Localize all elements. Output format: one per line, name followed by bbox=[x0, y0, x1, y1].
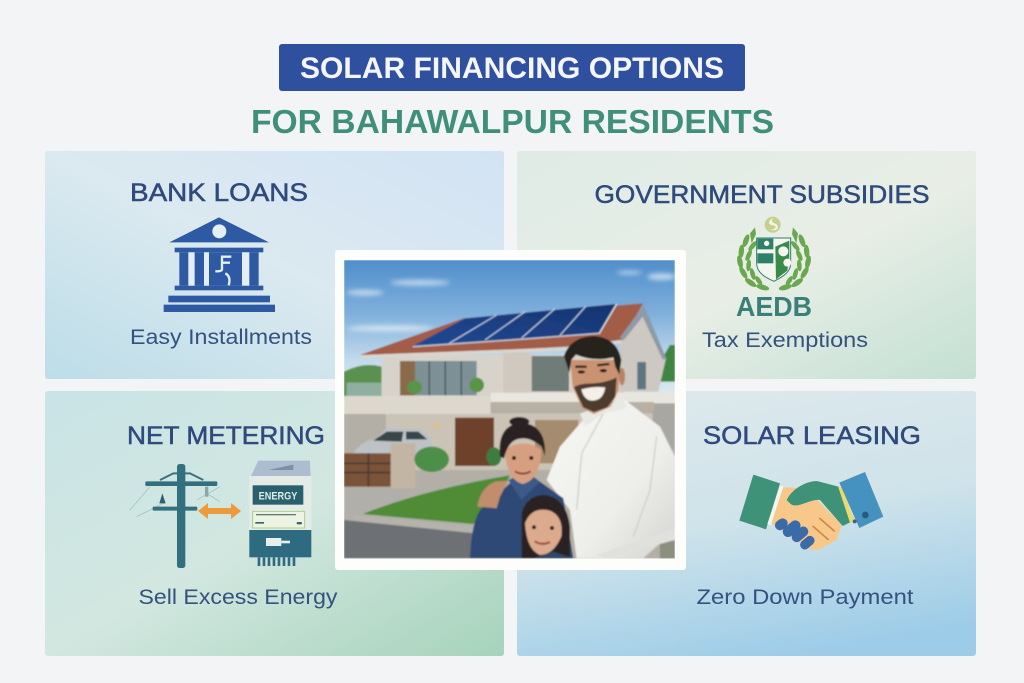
icon: bank building bbox=[164, 217, 275, 312]
icon: AEDB emblem bbox=[736, 217, 812, 292]
subtitle: FOR BAHAWALPUR RESIDENTS bbox=[251, 103, 774, 140]
solar panels bbox=[413, 304, 617, 346]
photo: family in front of solar house bbox=[344, 260, 676, 559]
text: tax exemptions: Tax Exemptions bbox=[702, 329, 868, 352]
heading: government subsidies: GOVERNMENT SUBSIDIES bbox=[594, 181, 930, 209]
trees bbox=[344, 365, 382, 397]
icon: energy meter bbox=[249, 461, 311, 566]
arrow: two-way energy flow bbox=[198, 503, 241, 519]
man's hand bbox=[477, 481, 508, 508]
roof bbox=[360, 303, 643, 355]
lower wall bbox=[386, 413, 653, 470]
wall upper bbox=[382, 355, 623, 397]
woman bbox=[470, 482, 573, 558]
man body bbox=[547, 400, 675, 558]
gate and pillar bbox=[344, 453, 391, 487]
windows upper bbox=[414, 360, 478, 396]
heading: net metering: NET METERING bbox=[127, 422, 325, 450]
title: SOLAR FINANCING OPTIONS bbox=[300, 52, 724, 85]
balconies bbox=[344, 396, 491, 414]
girl bbox=[522, 495, 570, 558]
ground base bbox=[344, 397, 675, 559]
icon: utility pole bbox=[130, 464, 220, 568]
icon: handshake bbox=[739, 472, 883, 551]
panel: net metering bbox=[45, 391, 504, 656]
heading: bank loans: BANK LOANS bbox=[130, 179, 308, 207]
title banner bbox=[279, 44, 745, 91]
car bbox=[353, 428, 432, 453]
door bbox=[455, 418, 494, 466]
text: AEDB: AEDB bbox=[736, 291, 812, 322]
icon: energy meter: ENERGY bbox=[259, 490, 297, 502]
ground bbox=[390, 488, 416, 490]
man head bbox=[570, 360, 620, 414]
photo frame bbox=[335, 250, 686, 570]
text: easy installments: Easy Installments bbox=[130, 326, 312, 349]
text: zero down payment: Zero Down Payment bbox=[696, 586, 914, 609]
panel: solar leasing bbox=[517, 391, 976, 656]
shrubs bbox=[414, 447, 449, 472]
text: sell excess energy: Sell Excess Energy bbox=[138, 586, 338, 609]
panel: bank loans bbox=[45, 151, 504, 379]
heading: solar leasing: SOLAR LEASING bbox=[703, 422, 921, 450]
panel: government subsidies bbox=[517, 151, 976, 379]
